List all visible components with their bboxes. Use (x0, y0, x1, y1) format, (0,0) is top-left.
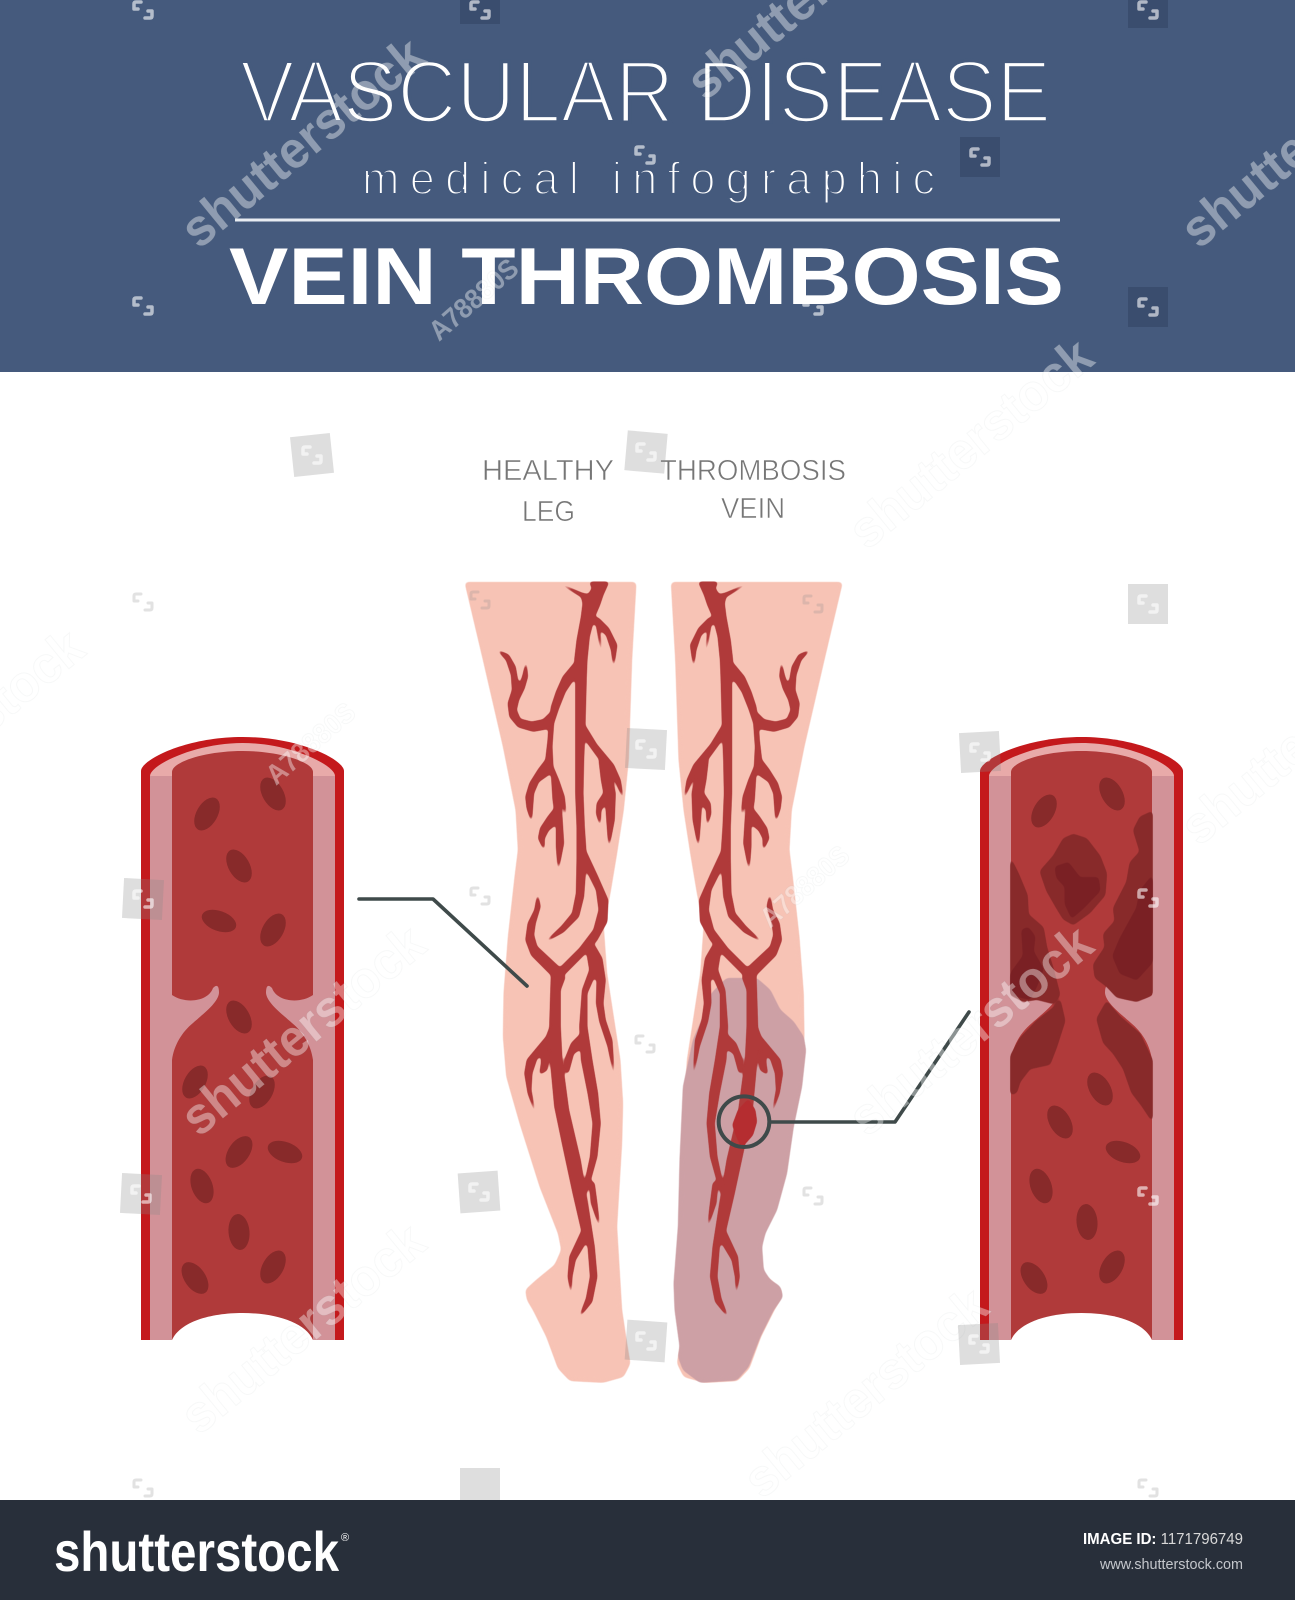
callout line: thrombosis (771, 1012, 969, 1122)
blood cells (1015, 773, 1143, 1299)
footer bar (0, 1500, 1295, 1600)
blood clot in vein (733, 1099, 757, 1147)
watermark text: shutterstock (733, 1276, 999, 1509)
footer logo: shutterstock (54, 1520, 340, 1583)
header divider (235, 218, 1060, 222)
watermark text: shutterstock (170, 26, 436, 259)
clots (1011, 811, 1152, 1122)
blood cells (176, 773, 305, 1299)
watermark squares (120, 0, 1168, 1508)
watermark small icons (134, 2, 1157, 1496)
label: thrombosis vein: THROMBOSIS (660, 455, 846, 487)
watermark text: shutterstock (170, 1212, 436, 1445)
watermark text: shutterstock (838, 914, 1104, 1147)
valve flaps (172, 986, 313, 1060)
healthy vessel cross-section (141, 737, 344, 1340)
heading: vein thrombosis: VEIN THROMBOSIS (229, 232, 1064, 322)
thrombosis leg with swelling, veins and clot (671, 582, 842, 1382)
label: thrombosis vein (660, 455, 846, 525)
header band (0, 0, 1295, 372)
label: healthy leg: LEG (522, 496, 575, 528)
watermark text: A78880S (260, 696, 361, 791)
callout line: healthy vein (359, 899, 527, 986)
watermark text: shutterstock (838, 327, 1104, 560)
subtitle: medical infographic (362, 153, 935, 204)
magnifier circle (719, 1096, 769, 1147)
title: vascular disease: VASCULAR DISEASE (240, 42, 1051, 141)
watermark text: A78880S (423, 252, 524, 347)
healthy leg with veins (465, 582, 636, 1382)
label: healthy leg: HEALTHY (482, 455, 614, 487)
image id: IMAGE ID: 1171796749 (1083, 1531, 1243, 1548)
registered mark: ® (341, 1532, 349, 1544)
swollen area (674, 978, 806, 1382)
thrombosis vessel cross-section (980, 737, 1183, 1340)
watermark text: A78880S (754, 839, 855, 934)
label: thrombosis vein: VEIN (721, 493, 785, 525)
watermark text: shutterstock (170, 914, 436, 1147)
label: healthy leg (482, 455, 614, 528)
website url: www.shutterstock.com (1099, 1556, 1243, 1573)
